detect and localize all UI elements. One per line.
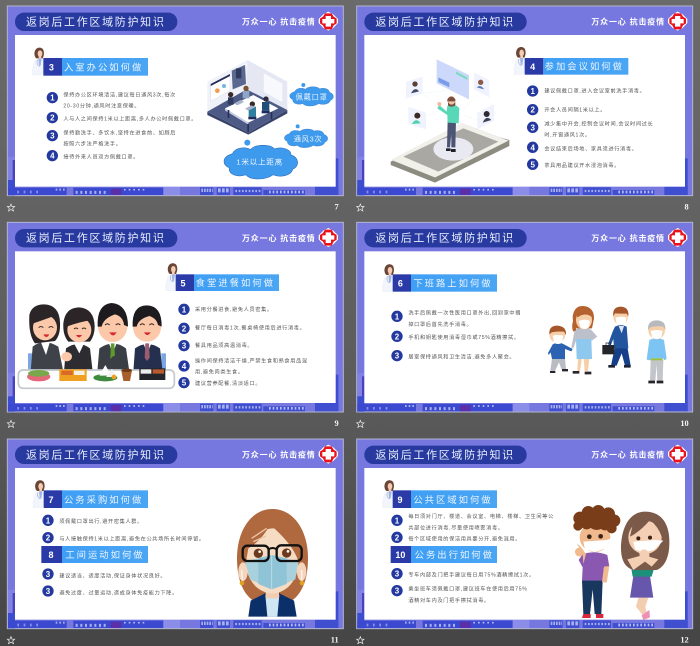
list 10: 专车内部及门把手建议每日用75%酒精擦拭1次。 xyxy=(408,571,535,579)
section heading: 入室办公如何做 xyxy=(64,62,143,73)
footer star xyxy=(357,637,364,644)
list 8 xyxy=(42,568,178,597)
boy and girl with masks illustration xyxy=(573,505,669,620)
list 8: 建议适当、适度活动,保证身体状况良好。 xyxy=(59,571,166,579)
section heading 10 xyxy=(391,546,497,563)
four people eating illustration xyxy=(18,303,174,388)
cloud: mask xyxy=(290,83,333,106)
slide 12: public areas and travel xyxy=(357,439,693,644)
list: 建议佩戴口罩,进入会议室前洗手消毒。 xyxy=(544,87,645,95)
page number: 10 xyxy=(680,419,689,428)
list: 2 xyxy=(182,324,187,333)
list: 3 xyxy=(182,342,187,351)
list 7 xyxy=(42,515,205,543)
cloud: distance xyxy=(224,140,298,179)
list: 5 xyxy=(530,160,535,169)
list: 采用分餐进食,避免人员密集。 xyxy=(195,305,273,313)
slogan: 万众一心 抗击疫情 xyxy=(591,233,665,243)
list: 3 xyxy=(395,352,400,361)
list 9: 2 xyxy=(395,533,400,542)
section heading 10: 10 xyxy=(395,550,405,560)
section heading 7 xyxy=(33,480,148,508)
list xyxy=(47,91,197,161)
list: 保持办公区环境清洁,建议每日通风3次,每次 xyxy=(63,91,176,99)
section heading: 食堂进餐如何做 xyxy=(196,277,275,288)
section heading 8: 工间运动如何做 xyxy=(65,549,145,560)
slogan: 万众一心 抗击疫情 xyxy=(591,450,665,460)
slogan: 万众一心 抗击疫情 xyxy=(242,450,316,460)
list: 1 xyxy=(182,305,187,314)
list: 会议结束后场地、家具须进行消毒。 xyxy=(544,144,638,152)
list: 1 xyxy=(530,87,535,96)
list 7: 与人接触保持1米以上距离,避免在公共场所长时间停留。 xyxy=(59,534,205,542)
section heading: 4 xyxy=(530,62,535,72)
list: 1 xyxy=(50,94,55,103)
list 7: 1 xyxy=(46,516,51,525)
slide 10: commute xyxy=(357,222,693,428)
section heading 9 xyxy=(382,480,497,508)
list: 居室保持通风和卫生清洁,避免多人聚会。 xyxy=(408,352,515,360)
list xyxy=(527,85,653,170)
page number: 8 xyxy=(684,203,689,212)
slide 7: office xyxy=(7,6,343,212)
slide 11: procurement and exercise xyxy=(7,439,343,644)
title: 返岗后工作区域防护知识 xyxy=(26,447,166,461)
section heading 8 xyxy=(41,546,148,563)
list: 4 xyxy=(50,152,55,161)
list: 开会人员间隔1米以上。 xyxy=(544,105,606,113)
slogan: 万众一心 抗击疫情 xyxy=(242,17,316,27)
slide frame xyxy=(357,6,693,196)
list: 接待外来人员双方佩戴口罩。 xyxy=(63,153,139,161)
list: 手机和钥匙使用消毒湿巾或75%酒精擦拭。 xyxy=(408,333,520,341)
list 10: 3 xyxy=(395,587,400,596)
section heading: 下班路上如何做 xyxy=(413,278,493,289)
section heading xyxy=(382,264,497,292)
list: 按照六步法严格洗手。 xyxy=(63,139,122,147)
list: 2 xyxy=(50,114,55,123)
slogan: 万众一心 抗击疫情 xyxy=(242,233,316,243)
title: 返岗后工作区域防护知识 xyxy=(375,447,515,461)
list 9: 每个区域使用的保洁用具要分开,避免混用。 xyxy=(408,534,521,542)
section heading xyxy=(166,263,279,291)
list: 洗手后佩戴一次性医用口罩外出,回到家中摘 xyxy=(408,309,521,317)
list 8: 3 xyxy=(46,570,51,579)
section heading 8: 8 xyxy=(48,550,53,560)
woman with glasses and mask illustration xyxy=(237,509,308,617)
title: 返岗后工作区域防护知识 xyxy=(26,14,166,28)
list: 保持勤洗手、多饮水,坚持在进食前、如厕后 xyxy=(63,128,176,136)
phone and man illustration xyxy=(391,59,509,183)
list 9: 每日须对门厅、楼道、会议室、电梯、楼梯、卫生间等公 xyxy=(408,512,554,520)
page number: 7 xyxy=(334,203,339,212)
cloud: distance: 1米以上距离 xyxy=(236,157,283,167)
section heading xyxy=(32,48,148,76)
list 9: 1 xyxy=(395,516,400,525)
list 7: 2 xyxy=(46,534,51,543)
title: 返岗后工作区域防护知识 xyxy=(26,231,166,245)
list 8: 3 xyxy=(46,587,51,596)
slide frame xyxy=(7,6,343,196)
page number: 12 xyxy=(680,635,689,644)
list: 4 xyxy=(182,362,187,371)
slide frame xyxy=(357,439,693,629)
section heading: 6 xyxy=(398,279,403,289)
footer star xyxy=(357,420,364,427)
footer star xyxy=(7,204,15,211)
section heading: 5 xyxy=(180,278,185,288)
list: 3 xyxy=(530,123,535,132)
list: 掉口罩后首先洗手消毒。 xyxy=(408,320,472,328)
list 10 xyxy=(391,568,535,604)
list: 建议营养配餐,清淡适口。 xyxy=(195,379,261,387)
section heading xyxy=(514,47,628,75)
section heading 7: 7 xyxy=(48,495,53,505)
list: 4 xyxy=(530,143,535,152)
list 10: 酒精对车内及门把手擦拭消毒。 xyxy=(408,596,490,604)
slide frame xyxy=(7,222,343,412)
slogan: 万众一心 抗击疫情 xyxy=(591,17,665,27)
section heading 7: 公务采购如何做 xyxy=(64,494,143,505)
page number: 9 xyxy=(334,419,339,428)
list: 2 xyxy=(530,106,535,115)
list 8: 避免过度、过量运动,造成身体免疫能力下降。 xyxy=(59,588,178,596)
list xyxy=(178,304,308,388)
title: 返岗后工作区域防护知识 xyxy=(375,14,515,28)
list: 5 xyxy=(182,379,187,388)
section heading 9: 9 xyxy=(397,495,402,505)
slide frame xyxy=(357,222,693,412)
slide frame xyxy=(7,439,343,629)
office illustration xyxy=(207,60,287,135)
title: 返岗后工作区域防护知识 xyxy=(375,231,515,245)
list: 减少集中开会,控制会议时间,会议时间过长 xyxy=(544,120,653,128)
list 10: 3 xyxy=(395,570,400,579)
footer star xyxy=(357,204,364,211)
section heading: 3 xyxy=(49,63,54,73)
list 9 xyxy=(391,512,554,543)
list: 用,避免肉类生食。 xyxy=(195,368,244,376)
footer star xyxy=(7,420,15,427)
cloud: mask: 佩戴口罩 xyxy=(296,92,328,101)
family with masks illustration xyxy=(548,306,667,383)
list 9: 共部位进行消毒,尽量使用喷雾消毒。 xyxy=(408,523,504,531)
slide 9: canteen xyxy=(7,222,343,428)
list: 餐具用品须高温消毒。 xyxy=(195,341,253,349)
list: 操作间保持清洁干燥,严禁生食和熟食用品混 xyxy=(195,356,308,364)
list: 时,开窗通风1次。 xyxy=(544,131,591,139)
cloud: ventilation xyxy=(284,124,328,148)
page number: 11 xyxy=(331,635,339,644)
footer star xyxy=(7,637,15,644)
section heading 9: 公共区域如何做 xyxy=(413,494,493,505)
list 10: 乘坐班车须佩戴口罩,建议班车在使用后用75% xyxy=(408,584,528,592)
list: 茶具用品建议开水浸泡消毒。 xyxy=(544,161,620,169)
list xyxy=(391,309,521,361)
cloud: ventilation: 通风3次 xyxy=(294,134,322,143)
list: 2 xyxy=(395,332,400,341)
slide 8: meeting xyxy=(357,6,693,212)
section heading 10: 公务出行如何做 xyxy=(415,549,494,560)
list 7: 须佩戴口罩出行,避开密集人群。 xyxy=(59,517,143,525)
section heading: 参加会议如何做 xyxy=(545,61,624,72)
list: 1 xyxy=(395,312,400,321)
list: 3 xyxy=(50,132,55,141)
list: 人与人之间保持1米以上距离,多人办公时佩戴口罩。 xyxy=(63,114,197,122)
list: 20-30分钟,通风时注意保暖。 xyxy=(63,101,140,109)
list: 餐厅每日消毒1次,餐桌椅使用后进行消毒。 xyxy=(195,323,305,331)
